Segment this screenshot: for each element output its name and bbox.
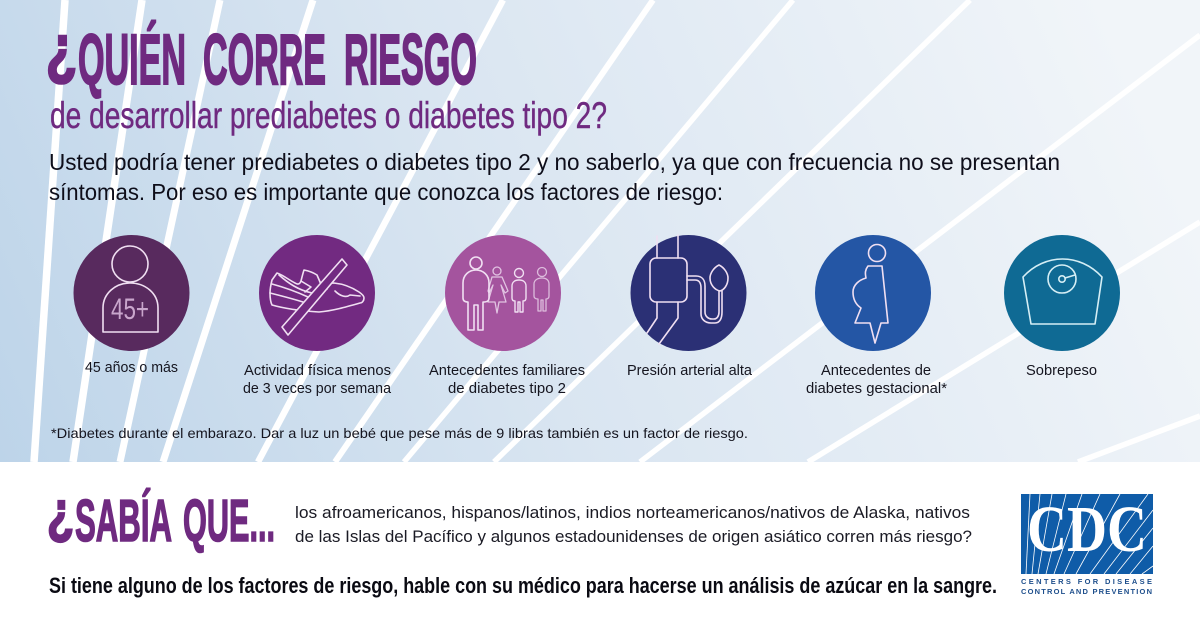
icon: pregnant woman <box>815 235 931 351</box>
panel: background with rays <box>0 0 1200 462</box>
label: de diabetes tipo 2 <box>448 381 566 397</box>
intro text <box>49 149 1060 205</box>
label <box>429 363 585 397</box>
icon: person 45+: 45+ <box>111 293 149 326</box>
label: Presión arterial alta <box>627 363 753 379</box>
text: higher-risk groups: de las Islas del Pacífico y algunos estadounidenses de origen asiático corren más riesgo? <box>295 528 972 546</box>
icon: weighing scale <box>1004 235 1120 351</box>
text: higher-risk groups <box>295 504 972 546</box>
text: RIESGO <box>344 21 477 100</box>
subtitle: de desarrollar prediabetes o diabetes tipo 2? <box>50 95 607 136</box>
label <box>243 363 392 397</box>
intro text: Usted podría tener prediabetes o diabetes tipo 2 y no saberlo, ya que con frecuencia no se presentan <box>49 149 1060 175</box>
title: QUIÉN <box>78 21 186 100</box>
risk factor: physical activity <box>243 235 392 397</box>
heading: did you know: SABÍA <box>75 488 172 554</box>
risk factor: overweight <box>1004 235 1120 379</box>
title <box>46 11 477 100</box>
heading: did you know: ¿ <box>47 480 74 545</box>
text: higher-risk groups: los afroamericanos, hispanos/latinos, indios norteamericanos/nativos de Alaska, nativos <box>295 504 970 522</box>
footnote: *Diabetes durante el embarazo. Dar a luz un bebé que pese más de 9 libras también es un factor de riesgo. <box>51 425 748 441</box>
intro text: síntomas. Por eso es importante que conozca los factores de riesgo: <box>49 179 723 205</box>
call to action: Si tiene alguno de los factores de riesgo, hable con su médico para hacerse un análisis de azúcar en la sangre. <box>49 573 997 598</box>
title: CORRE <box>203 21 326 100</box>
risk factor: age <box>74 235 190 376</box>
logo: CDC: CENTERS FOR DISEASE <box>1021 577 1152 586</box>
icon: crossed-out shoe <box>259 235 375 351</box>
logo: CDC <box>1021 493 1153 596</box>
label: de 3 veces por semana <box>243 381 392 397</box>
label: Antecedentes familiares <box>429 363 585 379</box>
icon: blood pressure cuff <box>630 235 746 351</box>
label: Sobrepeso <box>1026 363 1097 379</box>
panel: did you know <box>0 462 1200 630</box>
label: diabetes gestacional* <box>806 381 947 397</box>
label: 45 años o más <box>85 360 178 376</box>
logo: CDC: CONTROL AND PREVENTION <box>1021 587 1152 596</box>
label <box>806 363 947 397</box>
risk factor: high blood pressure <box>627 235 753 379</box>
label: Antecedentes de <box>821 363 931 379</box>
label: Actividad física menos <box>244 363 391 379</box>
risk factor: family history <box>429 235 585 397</box>
icon: family <box>445 235 561 351</box>
title: ¿ <box>46 11 77 87</box>
risk factor: gestational diabetes <box>806 235 947 397</box>
heading: did you know: QUE... <box>183 488 275 554</box>
logo: CDC: CDC <box>1027 493 1147 566</box>
icon: person 45+ <box>74 235 190 351</box>
